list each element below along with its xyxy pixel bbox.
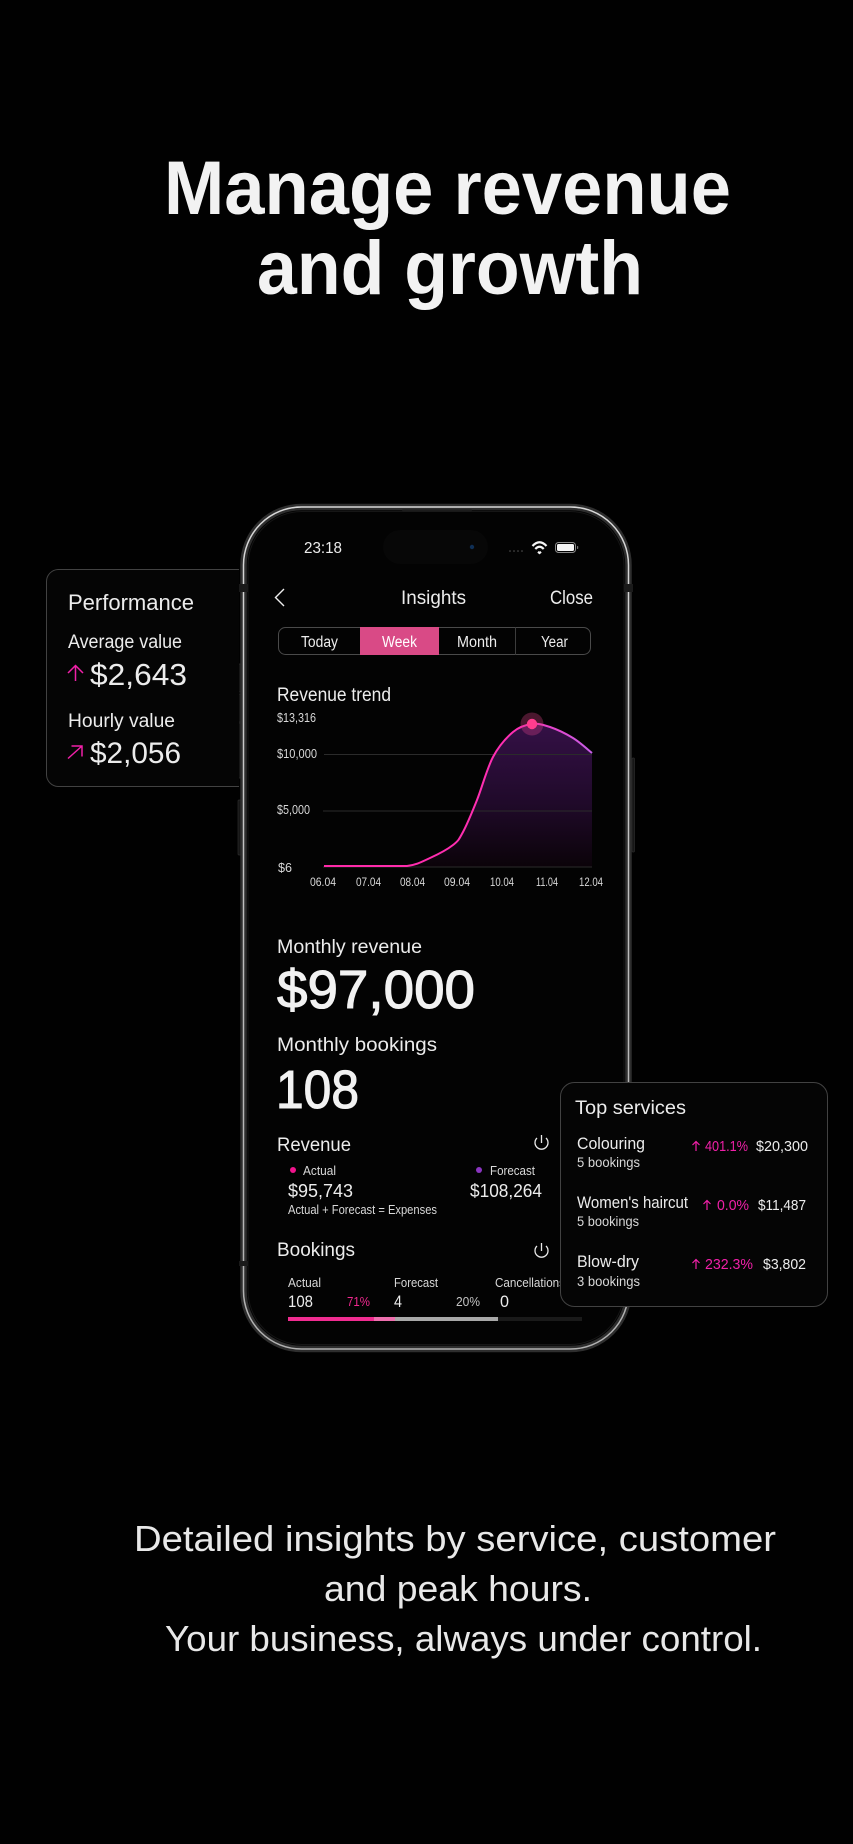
phone body	[239, 507, 633, 1349]
nav bar: Close	[550, 588, 593, 609]
panel: performance: Performance	[68, 590, 194, 615]
row: women's haircut: Women's haircut	[577, 1193, 688, 1212]
y axis labels: $5,000	[277, 803, 310, 817]
icon: power	[535, 1243, 548, 1257]
row: women's haircut	[577, 1193, 806, 1229]
phone	[238, 507, 634, 1349]
trend line	[324, 724, 592, 866]
panel: performance: $2,056	[90, 737, 181, 770]
period tabs: Week	[382, 634, 417, 651]
panel: top services: Top services	[575, 1098, 686, 1119]
bookings section	[277, 1240, 582, 1321]
monthly bookings: Monthly bookings	[277, 1034, 437, 1056]
x axis labels: 12.04	[579, 877, 604, 889]
period tabs: Today	[301, 634, 338, 651]
bookings section: 71%	[347, 1294, 370, 1309]
row: colouring: 5 bookings	[577, 1154, 640, 1170]
revenue section: Revenue	[277, 1135, 351, 1156]
nav bar: Insights	[401, 588, 466, 609]
icon: wifi	[532, 542, 546, 553]
monthly revenue: $97,000	[277, 960, 475, 1020]
bookings section: Forecast	[394, 1276, 438, 1290]
bookings section: Bookings	[277, 1240, 355, 1261]
revenue section: $95,743	[288, 1181, 353, 1201]
caption: Detailed insights by service, customer	[134, 1518, 776, 1559]
bookings section: Actual	[288, 1276, 321, 1290]
area fill	[324, 724, 592, 867]
y axis labels: $13,316	[277, 711, 316, 725]
x axis labels: 10.04	[490, 877, 515, 889]
row: blow-dry: 232.3%	[705, 1256, 753, 1273]
row: blow-dry: $3,802	[763, 1256, 806, 1273]
status bar: 23:18	[304, 540, 342, 557]
actual legend	[290, 1164, 336, 1178]
caption	[134, 1518, 776, 1659]
row: colouring: 401.1%	[705, 1138, 748, 1155]
x axis labels: 07.04	[356, 877, 382, 889]
status bar	[304, 530, 578, 564]
forecast legend: Forecast	[490, 1164, 535, 1178]
row: women's haircut: $11,487	[758, 1197, 806, 1214]
dynamic island	[383, 530, 488, 564]
panel: performance: $2,643	[90, 657, 187, 692]
title	[164, 146, 731, 311]
panel: performance	[46, 570, 239, 786]
y axis labels	[277, 711, 317, 875]
bookings section: 4	[394, 1292, 402, 1311]
caption: Your business, always under control.	[165, 1618, 762, 1659]
stacked progress bar	[288, 1317, 582, 1321]
x axis labels: 08.04	[400, 877, 426, 889]
icon: power	[535, 1135, 548, 1149]
icon: up arrow	[68, 666, 83, 681]
y axis labels: $10,000	[277, 747, 317, 761]
panel: performance: Average value	[68, 632, 182, 653]
row: blow-dry: Blow-dry	[577, 1252, 639, 1271]
period tabs: Month	[457, 634, 497, 651]
revenue section: $108,264	[470, 1181, 542, 1201]
bookings section: 0	[500, 1292, 509, 1311]
revenue section: Actual + Forecast = Expenses	[288, 1203, 437, 1217]
icon: battery	[556, 542, 578, 552]
row: colouring	[577, 1134, 808, 1170]
row: women's haircut: 0.0%	[717, 1197, 749, 1214]
title: Manage revenue	[164, 146, 731, 231]
caption: and peak hours.	[324, 1568, 592, 1609]
x axis labels	[310, 877, 604, 889]
y axis labels: $6	[278, 861, 292, 875]
x axis labels: 11.04	[536, 877, 558, 889]
bookings section: Cancellations	[495, 1276, 565, 1290]
period tabs	[278, 627, 590, 655]
panel: performance: Hourly value	[68, 711, 175, 732]
side buttons	[238, 664, 634, 855]
icon: diagonal arrow	[68, 746, 82, 758]
x axis labels: 09.04	[444, 877, 471, 889]
x axis labels: 06.04	[310, 877, 337, 889]
panel: top services	[560, 1082, 828, 1306]
peak marker	[520, 712, 544, 736]
monthly revenue: Monthly revenue	[277, 936, 422, 958]
row: blow-dry	[577, 1252, 806, 1289]
actual legend: Actual	[303, 1164, 336, 1178]
signal dots	[509, 550, 523, 552]
heading: revenue trend: Revenue trend	[277, 685, 391, 706]
row: colouring: Colouring	[577, 1134, 645, 1153]
period tabs: Year	[541, 634, 568, 651]
icon: back chevron	[276, 589, 284, 606]
bookings section: 108	[288, 1292, 313, 1311]
title: and growth	[257, 226, 643, 311]
line chart: revenue trend	[277, 711, 604, 889]
monthly bookings	[276, 1034, 437, 1120]
bookings section: 20%	[456, 1294, 480, 1309]
nav bar	[276, 588, 593, 609]
row: women's haircut: 5 bookings	[577, 1213, 639, 1229]
row: blow-dry: 3 bookings	[577, 1273, 640, 1289]
monthly bookings: 108	[276, 1060, 359, 1120]
row: colouring: $20,300	[756, 1138, 808, 1155]
revenue section	[277, 1135, 548, 1217]
